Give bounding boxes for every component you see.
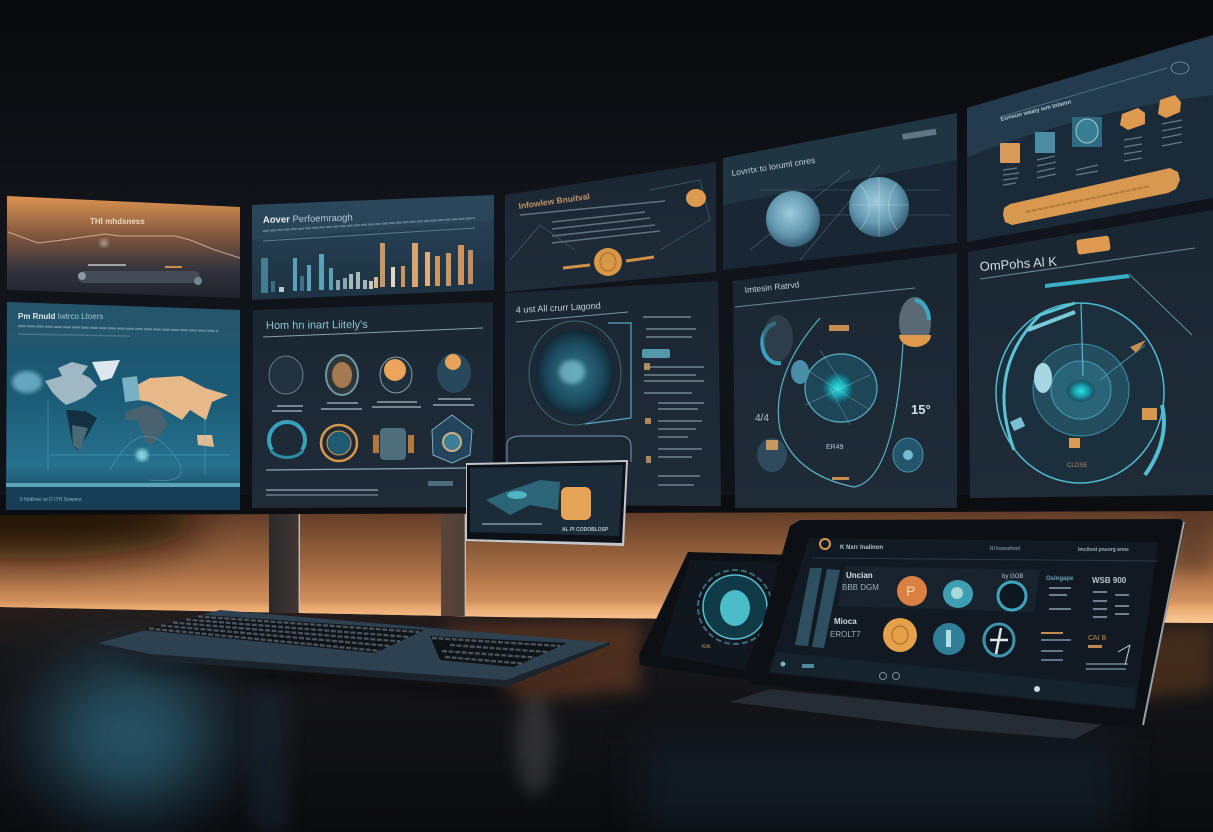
heading: Infowlew Bnuitval — [518, 191, 590, 211]
heading: Pm Rnuld Iwtrco Ltoers — [18, 312, 103, 321]
tablet base — [730, 689, 1143, 739]
orange hexagon one — [1120, 108, 1145, 130]
heading: Lovrrtx to Ioruml cnres — [731, 155, 816, 178]
badge — [902, 129, 937, 140]
globe left — [766, 191, 820, 247]
frame line — [585, 323, 631, 424]
text columns — [1003, 120, 1182, 185]
callout tab — [507, 436, 631, 462]
tablet caption — [482, 523, 542, 525]
panel: orange chart screen — [7, 196, 240, 298]
row one: Uncian — [846, 571, 873, 580]
panel: infoview screen — [505, 162, 716, 292]
orange banner — [1003, 168, 1180, 225]
chart node — [100, 239, 108, 247]
blue card — [1035, 132, 1055, 153]
large tablet — [747, 519, 1185, 729]
greenland — [92, 360, 120, 381]
line chart — [8, 232, 240, 258]
map glow — [12, 371, 42, 393]
number pad — [430, 636, 567, 667]
ring icon — [984, 624, 1014, 656]
orange badge — [686, 189, 706, 207]
stand legs — [269, 514, 466, 616]
divider — [266, 468, 470, 470]
panel: top right screen — [967, 35, 1213, 242]
orange circle — [897, 576, 927, 606]
floor surface — [0, 607, 1213, 832]
tablet footer — [770, 652, 1136, 708]
small tags — [829, 325, 849, 331]
lit orange band behind the screens — [0, 511, 1213, 623]
orange hexagon two — [1158, 95, 1181, 118]
panel: large radial screen — [968, 210, 1213, 498]
right stats: CAI B — [1088, 635, 1107, 642]
spokes — [1081, 303, 1083, 376]
heading: OmPohs Al K — [979, 254, 1058, 274]
tablet header — [812, 539, 1158, 561]
globe — [536, 330, 614, 416]
corner icon — [1171, 62, 1189, 74]
globe right — [849, 177, 909, 237]
tablet header: K Nxrr Inalinon — [840, 545, 883, 551]
big arc — [778, 318, 903, 487]
icon row one — [269, 353, 471, 395]
row one: by GOB — [1002, 574, 1023, 580]
small label: 4/4 — [755, 413, 769, 424]
right stats — [1041, 576, 1130, 670]
light segment — [1034, 363, 1052, 393]
tablet header: Rl lnswarlond — [990, 546, 1020, 552]
footer text — [266, 489, 378, 491]
lower right dial — [893, 438, 923, 472]
inner rings — [1033, 344, 1129, 436]
tablet graphic — [486, 480, 560, 515]
sidebar thumbnails — [795, 568, 840, 648]
teal bar — [1045, 274, 1130, 288]
globe card — [1072, 117, 1102, 147]
row one — [838, 566, 1040, 612]
tablet header: Imciloot pnuorg anos — [1078, 547, 1129, 553]
north america — [45, 362, 97, 405]
heading rule — [980, 248, 1195, 279]
row one: P — [906, 583, 915, 599]
heading: THI mhdsness — [90, 217, 145, 226]
panel: globe and list screen — [505, 281, 721, 506]
orange node — [594, 248, 622, 276]
control bar — [78, 271, 200, 283]
small wall tablet — [466, 460, 628, 546]
orange pieces — [1130, 340, 1146, 353]
panel: radial chart screen: ER49 — [826, 444, 844, 451]
heading: Hom hn inart Liitely's — [266, 319, 368, 332]
graph lines — [510, 180, 710, 260]
list icons — [644, 363, 651, 463]
lower left icon — [757, 438, 787, 472]
description lines — [18, 326, 218, 331]
orange dial icon — [899, 297, 931, 347]
orange badge — [1076, 235, 1111, 255]
heading: Aover Perfoemraogh — [263, 212, 353, 226]
map — [12, 360, 230, 481]
heading: Eunsuo waaiy wm Inlamn — [1000, 99, 1072, 123]
blue bars — [261, 254, 373, 293]
core dial — [805, 354, 877, 422]
screen frame shadow — [0, 495, 1213, 515]
icon labels — [272, 398, 474, 412]
blue blob — [791, 360, 809, 384]
panel: world map screen — [6, 302, 240, 510]
row two: EROLT7 — [830, 630, 861, 639]
side tablet — [639, 552, 795, 681]
small wall tablet: AL PI CODOBLOSP — [562, 527, 609, 533]
row two — [830, 617, 1014, 656]
key area — [143, 615, 424, 653]
orange circle — [883, 618, 917, 652]
right stats: WSB 900 — [1092, 576, 1127, 585]
text lines — [520, 201, 665, 243]
teal ring icon — [762, 323, 781, 363]
list lines — [643, 316, 704, 486]
heading: Imtesin Ratrvd — [744, 279, 800, 295]
africa — [125, 405, 168, 445]
icon row two — [269, 415, 472, 463]
gauge — [703, 575, 767, 639]
australia — [197, 435, 214, 447]
label: CLOSE — [1067, 463, 1087, 469]
teal circle — [943, 580, 973, 608]
panel: radial chart screen — [733, 253, 957, 508]
south america — [66, 410, 97, 450]
heading: 4 ust All crurr Lagond — [516, 301, 601, 315]
eurasia — [137, 376, 228, 420]
subtitle line — [263, 218, 475, 231]
core — [1067, 380, 1095, 402]
footer text: II Nrdlmw ce D ITH Sownes — [20, 497, 82, 503]
number: 15° — [911, 402, 931, 417]
teal chip — [642, 349, 670, 358]
progress line — [6, 483, 240, 487]
panel: bar chart screen — [252, 195, 494, 300]
orange tablet card — [561, 487, 591, 520]
keyboard — [98, 610, 610, 696]
teal circle — [933, 623, 965, 655]
row two: Mioca — [834, 617, 857, 626]
grid lines — [750, 165, 950, 260]
background wall — [0, 0, 1213, 620]
panel: icon grid screen — [252, 302, 493, 508]
right stats: Oslngape — [1046, 576, 1074, 582]
outer ring — [996, 303, 1164, 483]
panel: globes screen — [723, 113, 957, 270]
orange bars — [374, 243, 473, 288]
orange card — [1000, 143, 1020, 163]
teal ring — [998, 582, 1026, 610]
side tablet: Kirk — [702, 644, 711, 650]
row one: BBB DGM — [842, 583, 879, 592]
